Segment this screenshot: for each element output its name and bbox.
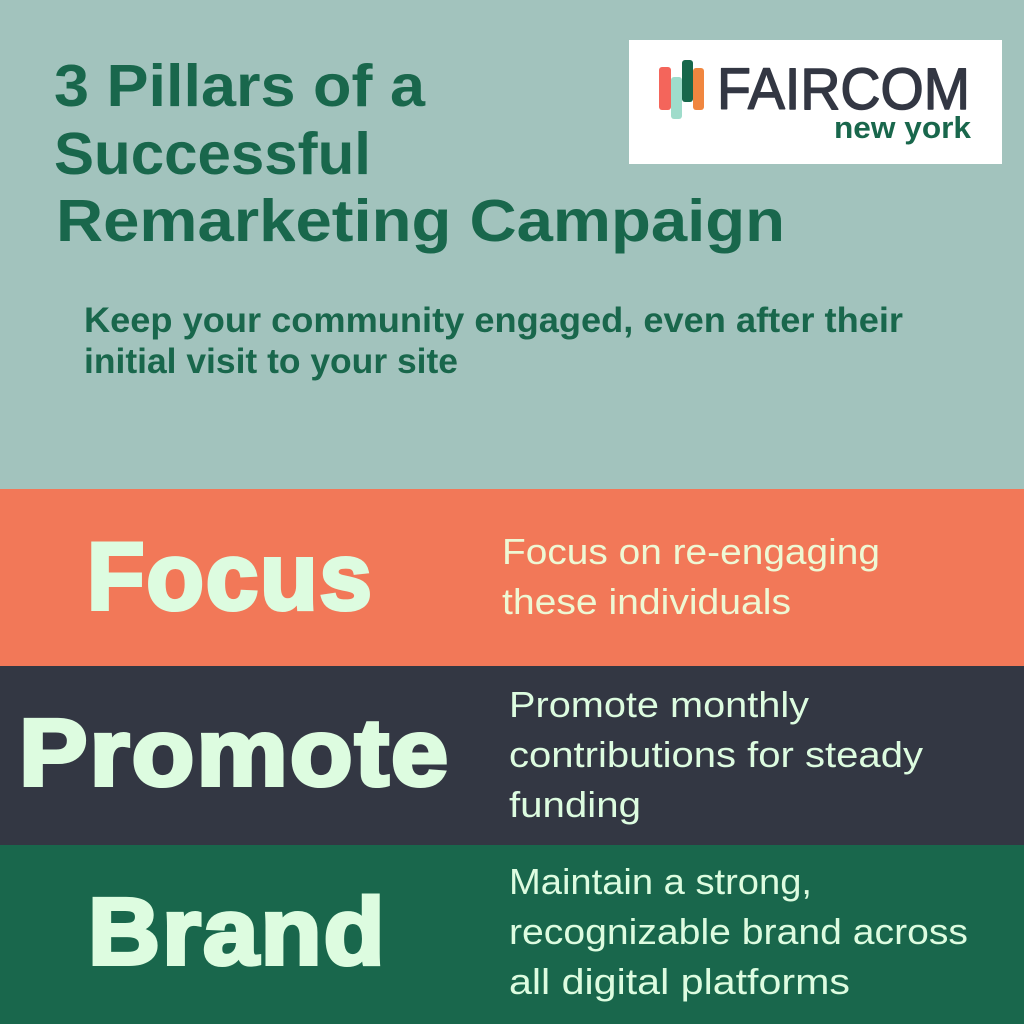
text: focus description	[502, 531, 880, 622]
text: promote description: contributions for steady	[509, 734, 923, 775]
icon: logo bars	[659, 60, 704, 119]
subtitle	[84, 301, 903, 381]
logo tagline: new york	[834, 110, 972, 145]
subtitle: Keep your community engaged, even after their	[84, 301, 903, 340]
subtitle: initial visit to your site	[84, 342, 458, 381]
text: focus description: Focus on re-engaging	[502, 531, 880, 572]
heading: promote: Promote	[19, 699, 450, 805]
panel: promote	[0, 666, 1024, 845]
title: Successful	[54, 121, 371, 187]
title: 3 Pillars of a	[54, 53, 426, 119]
text: promote description	[509, 684, 923, 825]
title: Remarketing Campaign	[56, 188, 785, 254]
logo: Faircom New York	[629, 40, 1002, 164]
text: brand description: all digital platforms	[509, 961, 850, 1002]
text: focus description: these individuals	[502, 581, 791, 622]
text: brand description: Maintain a strong,	[509, 861, 812, 902]
panel: brand	[0, 845, 1024, 1024]
text: brand description	[509, 861, 968, 1002]
heading: brand: Brand	[88, 878, 387, 984]
text: brand description: recognizable brand across	[509, 911, 968, 952]
title	[54, 53, 785, 254]
text: promote description: Promote monthly	[509, 684, 809, 725]
logo wordmark: FAIRCOM	[717, 57, 970, 122]
text: promote description: funding	[509, 784, 641, 825]
panel: focus	[0, 489, 1024, 666]
heading: focus: Focus	[87, 524, 374, 630]
